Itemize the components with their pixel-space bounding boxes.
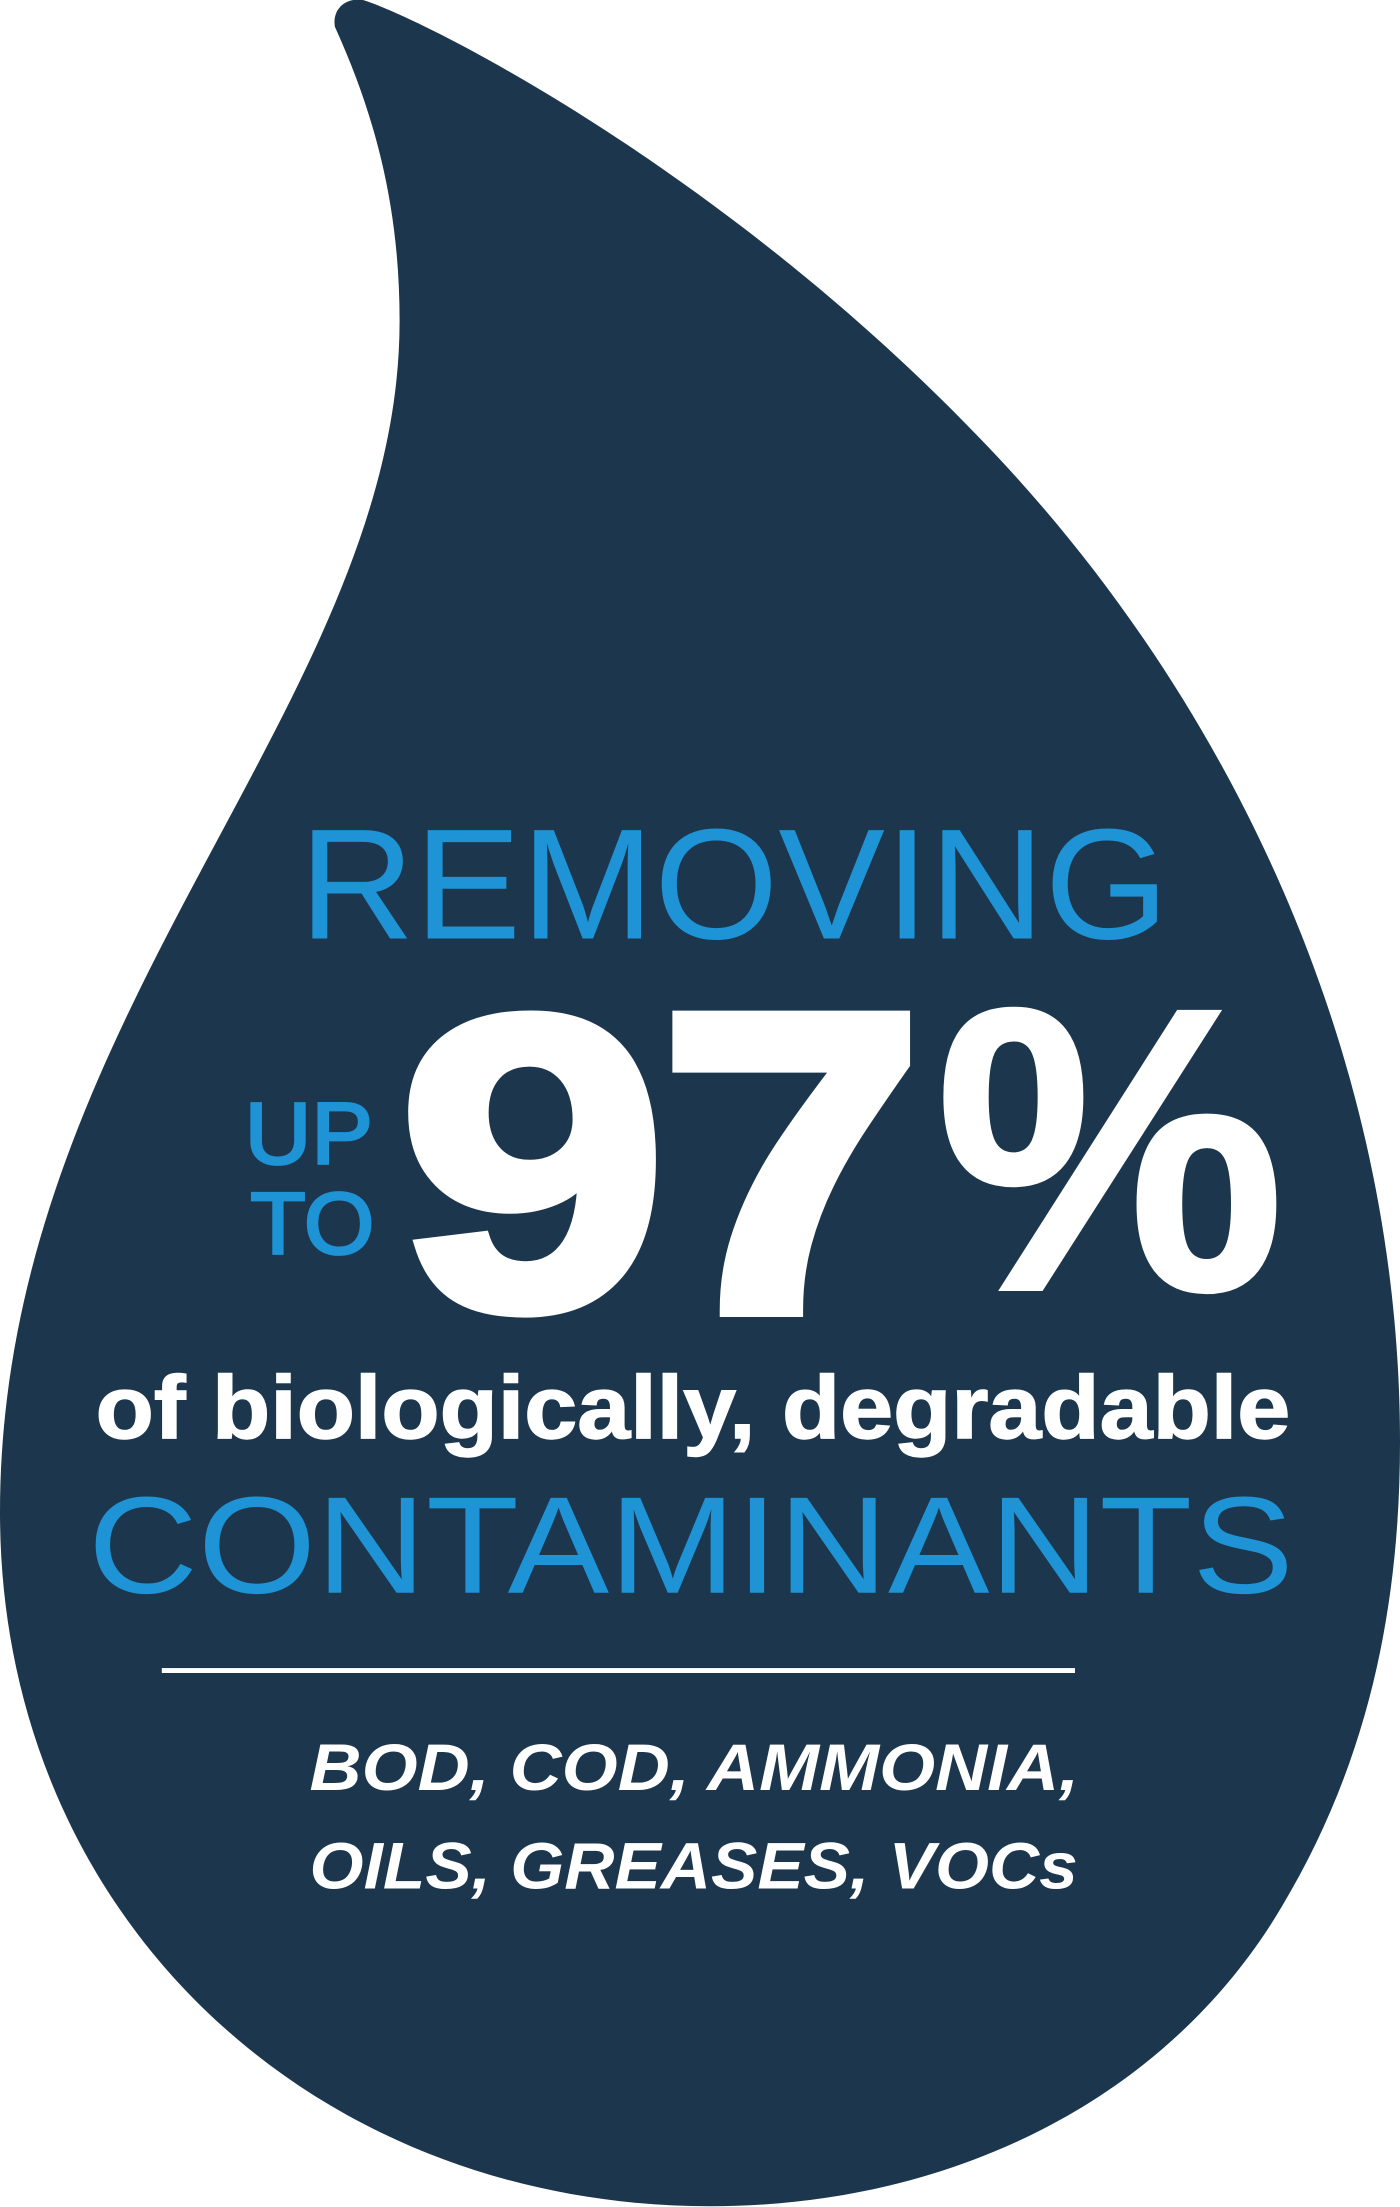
contaminant list line 2: OILS, GREASES, VOCs	[310, 1829, 1078, 1903]
percent sign: %	[936, 926, 1285, 1375]
contaminant list line 1: BOD, COD, AMMONIA,	[310, 1731, 1079, 1805]
big number: 97: 9	[398, 930, 667, 1397]
subheading: biologically degradable: of biologically, degradable	[96, 1358, 1290, 1457]
heading: contaminants: CONTAMINANTS	[88, 1469, 1294, 1623]
heading: removing: REMOVING	[299, 797, 1169, 973]
big number: 97	[398, 926, 923, 1401]
divider line	[162, 1668, 1075, 1673]
big number: 97: 7	[660, 926, 923, 1401]
label: to: TO	[250, 1176, 374, 1273]
label: up: UP	[245, 1086, 373, 1183]
